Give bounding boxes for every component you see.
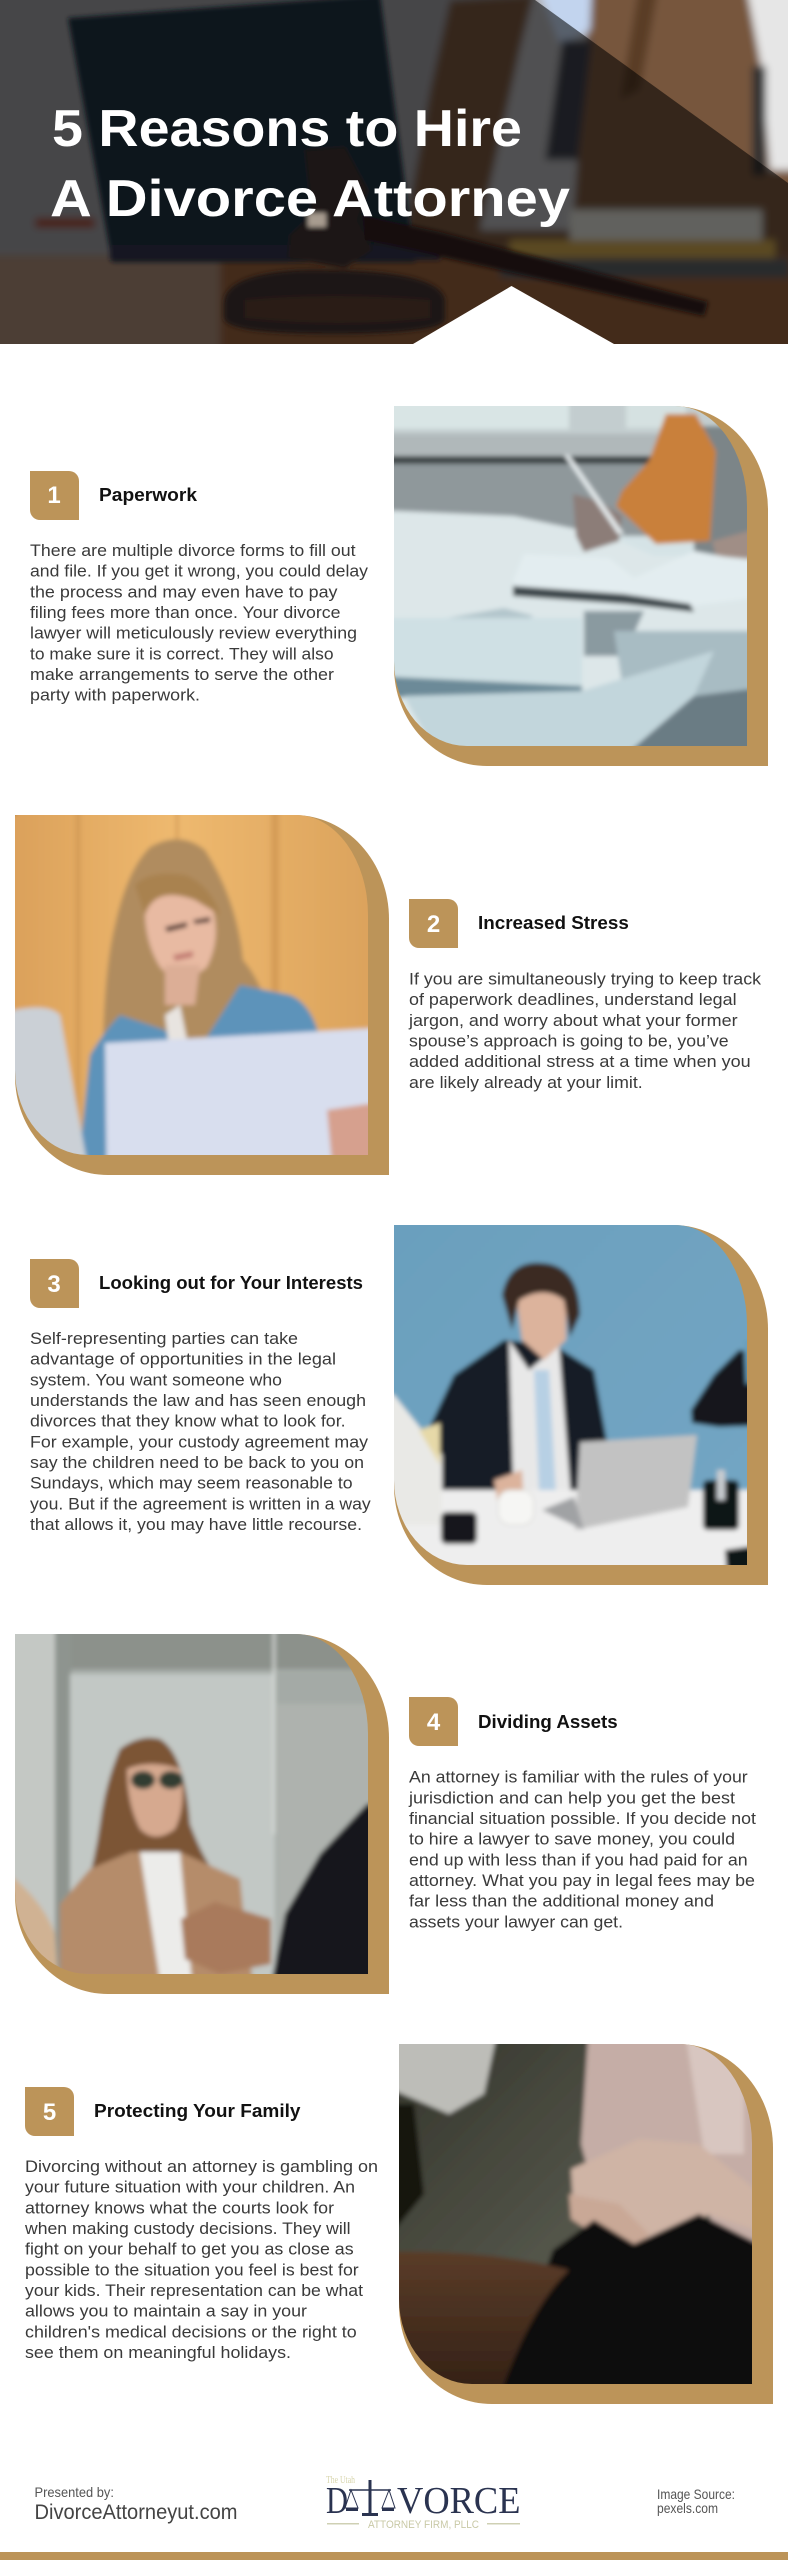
heading: Protecting Your Family: Protecting Your Family — [94, 2100, 301, 2121]
body text 4: to hire a lawyer to save money, you could — [409, 1831, 735, 1849]
photo card 5: hands removing a wedding ring — [399, 2044, 773, 2404]
body text 4: far less than the additional money and — [409, 1893, 714, 1911]
body text 5: allows you to maintain a say in your — [25, 2303, 308, 2321]
body text 2 — [408, 970, 762, 1092]
body text 1: and file. If you get it wrong, you could delay — [30, 563, 369, 581]
badge 5 — [25, 2087, 74, 2136]
icon: scales of justice — [345, 2480, 395, 2516]
body text 1: There are multiple divorce forms to fill out — [30, 542, 356, 560]
heading: Looking out for Your Interests: Looking out for Your Interests — [99, 1272, 363, 1293]
logo: The Utah Divorce Attorney Firm, PLLC: ATTORNEY FIRM, PLLC — [368, 2519, 479, 2531]
photo card 1: hand writing on paperwork — [394, 406, 768, 766]
body text 3: advantage of opportunities in the legal — [30, 1351, 336, 1369]
presented by: DivorceAttorneyut.com — [34, 2501, 238, 2524]
section 4: Dividing Assets — [15, 1634, 756, 1994]
badge 2: 2 — [427, 911, 440, 938]
badge 1 — [30, 471, 79, 520]
image source — [657, 2486, 735, 2516]
body text 3: divorces that they know what to look for. — [30, 1413, 346, 1431]
photo card 2: woman reading papers — [15, 815, 389, 1175]
header panel — [0, 0, 788, 380]
body text 3: that allows it, you may have little recourse. — [30, 1516, 362, 1534]
badge 5: 5 — [43, 2099, 56, 2126]
title: 5 Reasons to Hire — [52, 100, 522, 158]
body text 2: are likely already at your limit. — [409, 1074, 643, 1092]
badge 2 — [409, 899, 458, 948]
body text 3: understands the law and has seen enough — [30, 1392, 366, 1410]
body text 1: the process and may even have to pay — [30, 583, 338, 601]
photo card 4: woman shaking hands — [15, 1634, 389, 1994]
heading: Paperwork: Paperwork — [99, 484, 198, 505]
body text 4: financial situation possible. If you decide not — [409, 1810, 756, 1828]
body text 5: your kids. Their representation can be what — [25, 2282, 363, 2300]
body text 3: Self-representing parties can take — [30, 1330, 298, 1348]
body text 3: say the children need to be back to you on — [30, 1454, 364, 1472]
logo: The Utah Divorce Attorney Firm, PLLC — [326, 2475, 520, 2531]
body text 4 — [408, 1769, 756, 1931]
heading: Increased Stress: Increased Stress — [478, 912, 629, 933]
body text 4: attorney. What you pay in legal fees may be — [409, 1872, 755, 1890]
body text 2: jargon, and worry about what your former — [408, 1012, 738, 1030]
gold bottom bar — [0, 2552, 788, 2560]
title — [50, 100, 570, 228]
body text 5: Divorcing without an attorney is gambling on — [25, 2158, 378, 2176]
body text 4: end up with less than if you had paid for an — [409, 1851, 748, 1869]
body text 5: children's medical decisions or the right to — [25, 2323, 357, 2341]
body text 4: jurisdiction and can help you get the best — [408, 1789, 735, 1807]
body text 2: added additional stress at a time when you — [409, 1053, 751, 1071]
dark diagonal overlay — [0, 0, 788, 344]
white notch triangle — [413, 286, 614, 344]
logo: The Utah Divorce Attorney Firm, PLLC: D — [326, 2480, 348, 2522]
badge 4: 4 — [427, 1709, 441, 1736]
body text 1: make arrangements to serve the other — [30, 666, 335, 684]
body text 3: For example, your custody agreement may — [30, 1433, 369, 1451]
image source: Image Source: — [657, 2486, 735, 2502]
section 1: Paperwork — [30, 406, 768, 766]
body text 3: system. You want someone who — [30, 1371, 282, 1389]
badge 3 — [30, 1259, 79, 1308]
body text 4: assets your lawyer can get. — [409, 1913, 623, 1931]
photo card 3: man in suit at laptop — [394, 1225, 768, 1585]
section 5: Protecting Your Family — [25, 2044, 773, 2404]
body text 5: possible to the situation you feel is best for — [25, 2261, 359, 2279]
heading: Dividing Assets: Dividing Assets — [478, 1711, 618, 1732]
badge 1: 1 — [47, 482, 61, 509]
badge 3: 3 — [47, 1271, 61, 1298]
body text 5: see them on meaningful holidays. — [25, 2344, 291, 2362]
body text 1: filing fees more than once. Your divorce — [30, 604, 341, 622]
section 3: Looking out for Your Interests — [30, 1225, 768, 1585]
body text 1: lawyer will meticulously review everything — [30, 625, 357, 643]
header photo: gavel on a desk with attorney behind — [0, 0, 788, 380]
body text 3: you. But if the agreement is written in a way — [30, 1495, 372, 1513]
body text 2: If you are simultaneously trying to keep track — [409, 970, 762, 988]
presented by: Presented by: — [34, 2484, 114, 2500]
body text 5: attorney knows what the courts look for — [25, 2199, 335, 2217]
body text 3 — [30, 1330, 372, 1534]
body text 3: Sundays, which may seem reasonable to — [30, 1475, 353, 1493]
body text 1: to make sure it is correct. They will also — [30, 645, 334, 663]
body text 2: spouse’s approach is going to be, you’ve — [409, 1032, 729, 1050]
logo: The Utah Divorce Attorney Firm, PLLC: The Utah — [326, 2475, 355, 2486]
title: A Divorce Attorney — [50, 170, 570, 228]
image source: pexels.com — [657, 2500, 718, 2516]
body text 1 — [30, 542, 369, 705]
badge 4 — [409, 1697, 458, 1746]
body text 5: your future situation with your children. An — [25, 2179, 355, 2197]
presented by — [34, 2484, 238, 2524]
body text 1: party with paperwork. — [30, 687, 200, 705]
body text 4: An attorney is familiar with the rules of your — [409, 1769, 748, 1787]
footer — [0, 2475, 788, 2560]
body text 5 — [24, 2158, 378, 2362]
body text 5: fight on your behalf to get you as close as — [25, 2241, 354, 2259]
logo: The Utah Divorce Attorney Firm, PLLC: VORCE — [397, 2480, 520, 2522]
body text 5: when making custody decisions. They will — [24, 2220, 351, 2238]
body text 2: of paperwork deadlines, understand legal — [409, 991, 737, 1009]
section 2: Increased Stress — [15, 815, 761, 1175]
